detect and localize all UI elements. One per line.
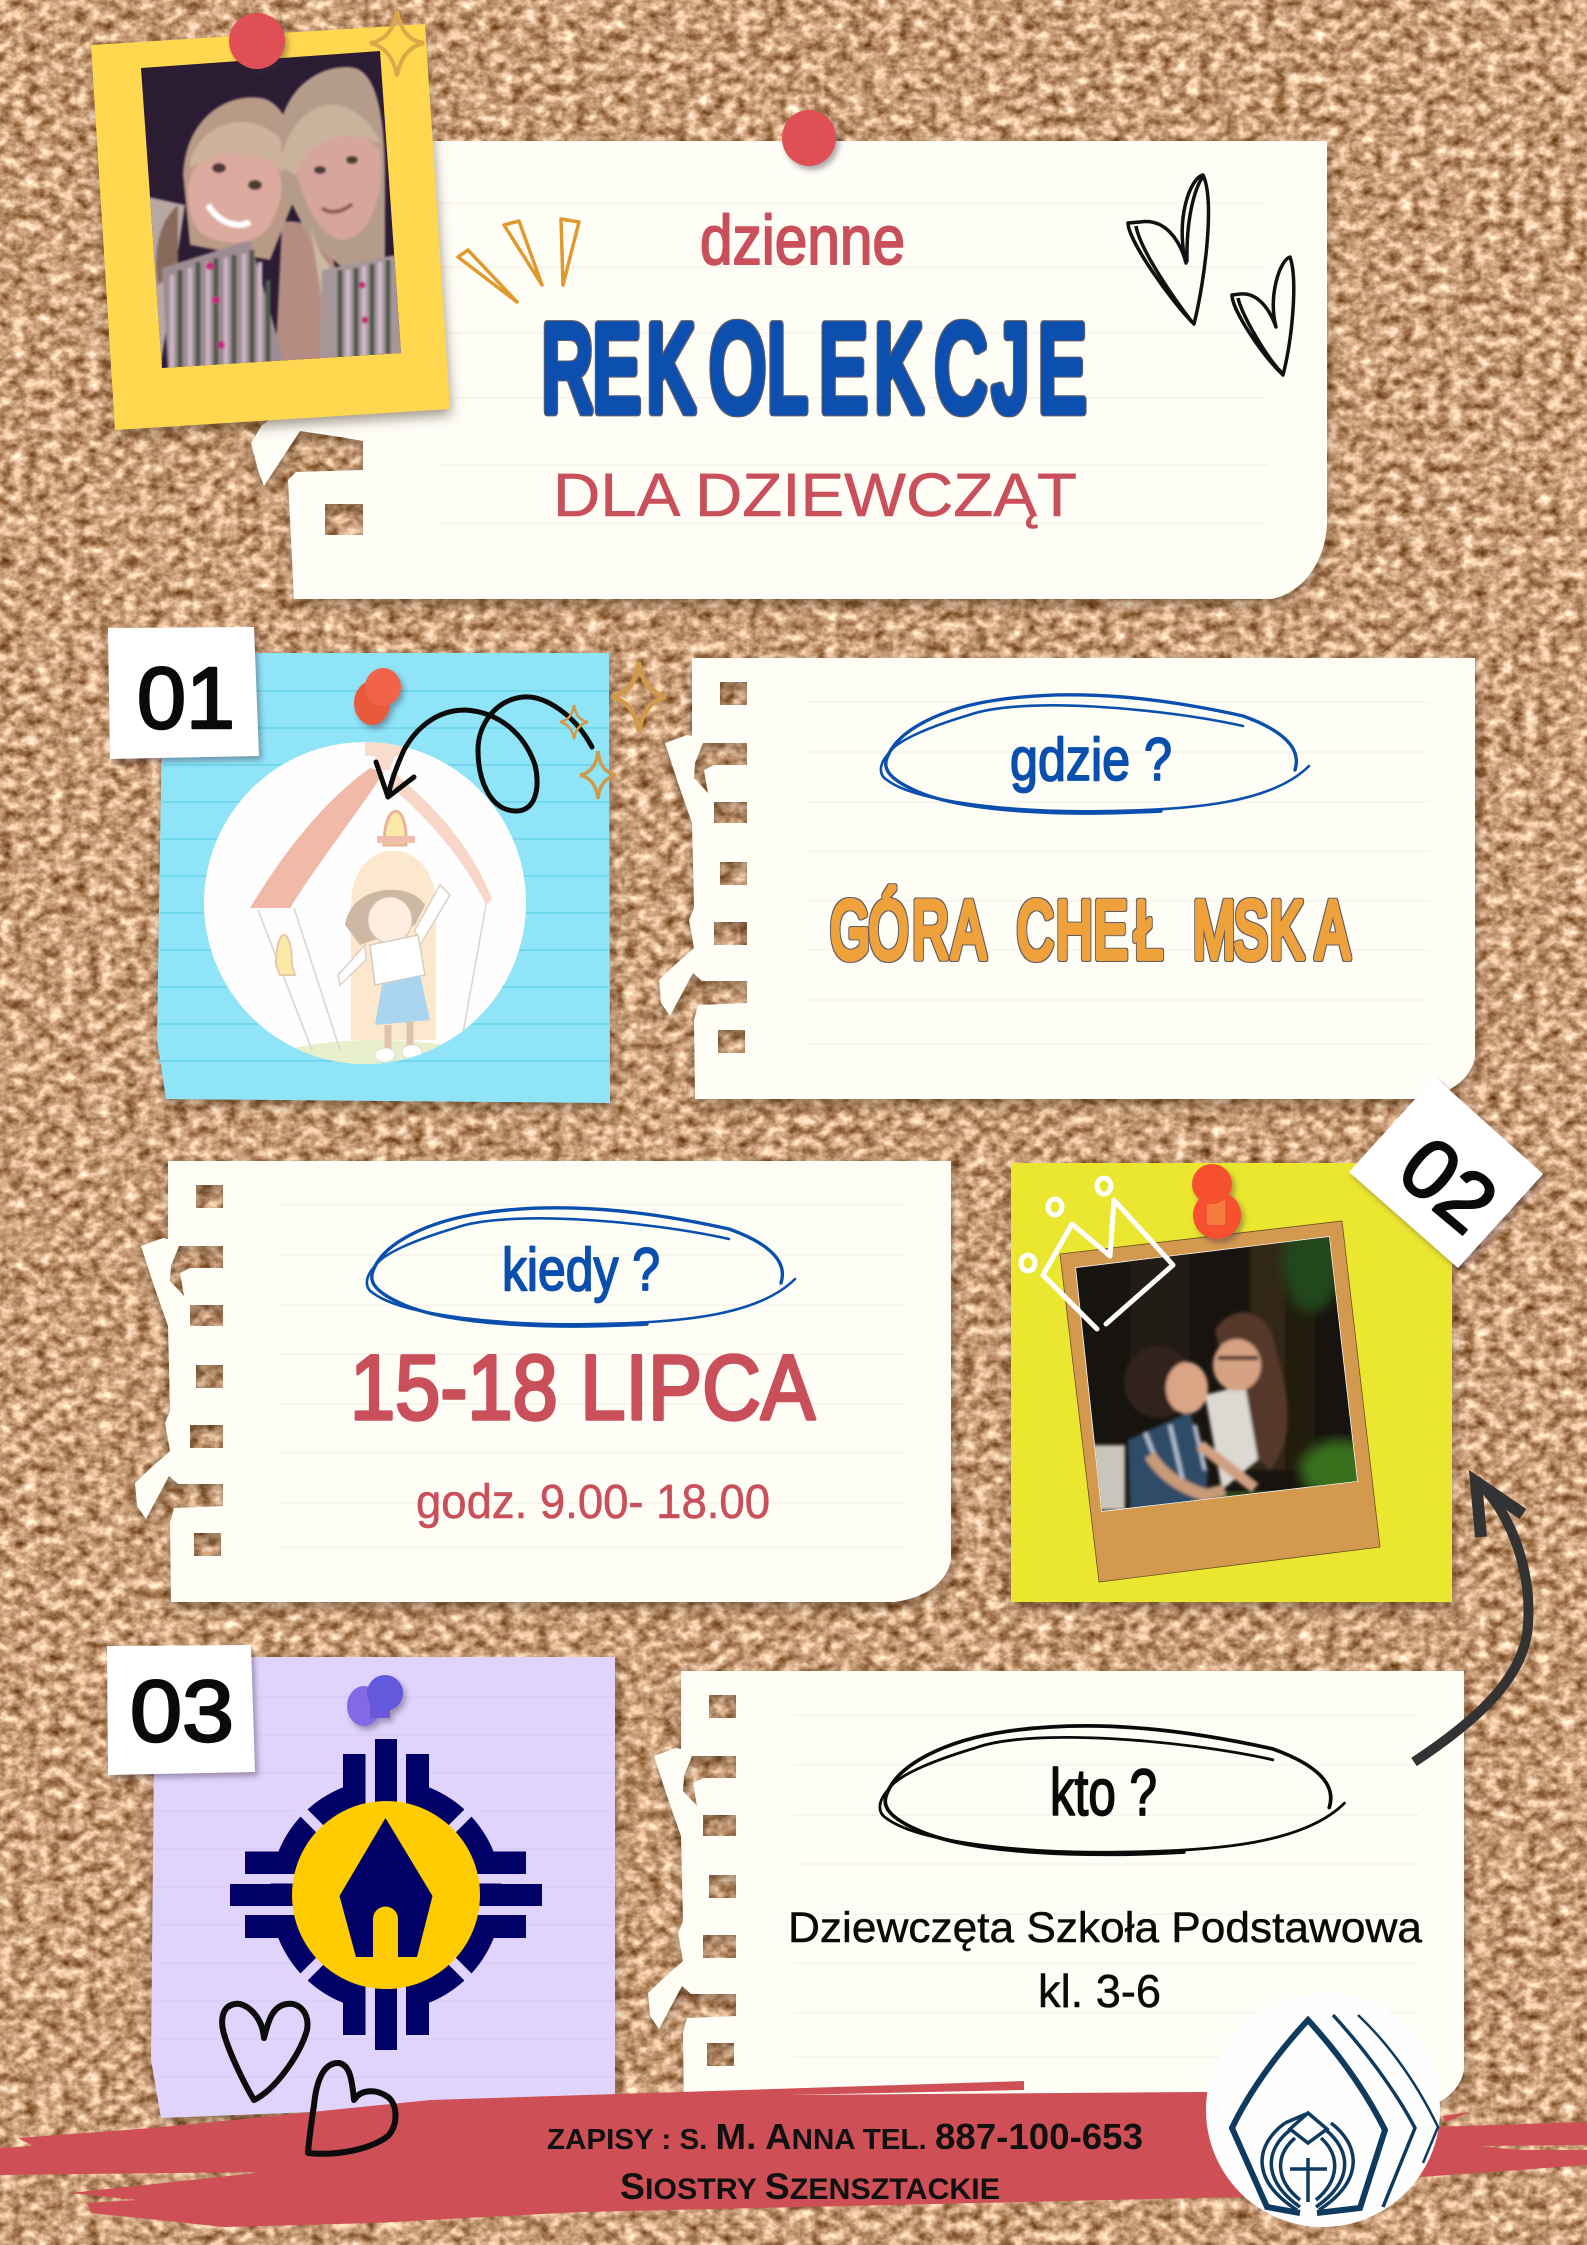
polaroid frame [1060,1212,1380,1582]
left girl hair [183,97,298,260]
panel: title note [251,110,1327,599]
left girl dress [162,240,285,372]
label: 02 [1349,1077,1543,1268]
scribble ellipse black [880,1726,1344,1854]
torn paper [251,141,1327,599]
pin: red orange [1192,1164,1241,1239]
label: 03 [107,1645,255,1775]
arrow: curly black [376,697,592,811]
torn paper [135,1161,951,1602]
text: DLA DZIEWCZĄT: DLA DZIEWCZĄT [553,461,1077,529]
text: godz. 9.00- 18.00: godz. 9.00- 18.00 [416,1476,770,1529]
pin: purple [347,1675,403,1726]
panel: yellow note 02 [1011,1077,1543,1602]
text: kl. 3-6: kl. 3-6 [1038,1965,1161,2017]
scribble ellipse blue [881,695,1309,813]
heading: gdzie ?: gdzie ? [1010,726,1172,793]
heading: kiedy ?: kiedy ? [502,1236,660,1303]
lavender paper [151,1657,615,2118]
label: 01 [108,627,259,759]
banner: red brush stroke [0,2081,1587,2227]
text: 15-18 LIPCA: 15-18 LIPCA [350,1337,816,1439]
panel: kiedy [135,1161,951,1602]
pin: red [354,668,401,725]
icon: white crown [1021,1178,1173,1329]
heading: REKOLEKCJE: REKOLEKCJE [542,300,1086,437]
oval picture: girl and chapel [204,742,526,1070]
text: GÓRA CHEŁMSKA: GÓRA CHEŁMSKA [830,885,1350,976]
text: Siostry Szensztackie: SIOSTRY SZENSZTACKIE [620,2166,1000,2207]
icon: hearts [1128,175,1294,375]
icon: hearts on banner [222,2004,396,2154]
logo: Siostry Szensztackie emblem [1206,1993,1440,2227]
text: Dziewczęta Szkoła Podstawowa: Dziewczęta Szkoła Podstawowa [788,1904,1422,1952]
icon: orange spikes [458,219,579,302]
heading: kto ?: kto ? [1050,1755,1157,1829]
photo: two girls sitting [1060,1212,1380,1520]
panel: blue note 01 [108,627,666,1103]
arrow: dark curved up [1414,1480,1528,1762]
pin: photo note [229,13,285,69]
girl [338,885,450,985]
photo: two girls [141,51,401,368]
label: 02: 02 [1382,1119,1515,1251]
right girl dress [320,255,402,362]
panel: lavender note 03 [107,1645,615,2118]
left girl face [188,146,282,243]
right girl face [292,133,381,240]
yellow paper [1011,1163,1452,1602]
text: dzienne: dzienne [700,201,905,279]
text: zapisy: ZAPISY : S. M. ANNA TEL. 887-100-653 [547,2116,1143,2157]
label: 03: 03 [130,1663,234,1760]
icon: sparkles [560,662,666,799]
torn paper [648,1671,1464,2112]
yellow paper [91,24,450,430]
panel: kto [648,1671,1464,2112]
scribble ellipse blue [367,1208,795,1326]
panel: yellow photo note [91,11,450,430]
logo: navy cross with yellow circle and house [202,1711,570,2079]
pin: title note [782,110,836,166]
blue paper [157,653,610,1103]
torn paper [659,658,1475,1099]
icon: gold sparkle [370,11,424,76]
panel: gdzie [659,658,1475,1099]
label: 01: 01 [137,650,235,747]
right girl hair [280,67,385,270]
